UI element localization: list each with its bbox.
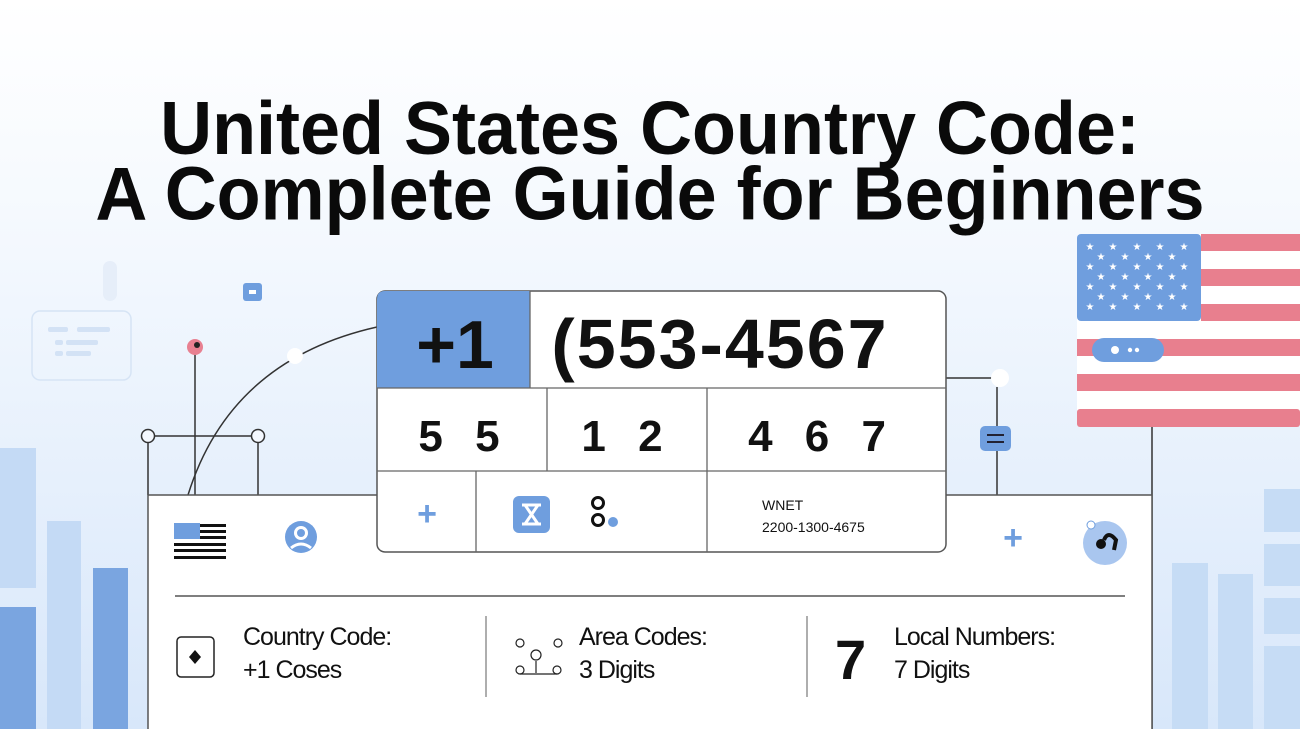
phone number card: + (417, 495, 437, 533)
flag: ★ (1180, 262, 1189, 273)
flag: ★ (1097, 252, 1106, 263)
flag: ★ (1133, 302, 1142, 313)
icon: small blue square (243, 283, 262, 301)
phone number card: 5 5 (418, 412, 510, 461)
stat: country code (177, 623, 391, 684)
flag: ★ (1109, 262, 1118, 273)
icon: equals badge (980, 426, 1011, 451)
flag: ★ (1133, 262, 1142, 273)
icon: blue badge (513, 496, 550, 533)
flag: ★ (1086, 262, 1095, 273)
phone number card: 2200-1300-4675 (762, 519, 865, 535)
stat: country code: Country Code: (243, 623, 391, 651)
stat: local numbers: Local Numbers: (894, 623, 1055, 651)
title: United States Country Code: (160, 87, 1140, 171)
flag: ★ (1156, 282, 1165, 293)
bottom panel: 3 Digits (579, 656, 655, 684)
flag: ★ (1168, 252, 1177, 263)
white node on arc (287, 348, 303, 364)
phone number card (377, 291, 946, 552)
flag: ★ (1156, 242, 1165, 253)
phone number card: 1 2 (581, 412, 673, 461)
stat: local numbers: 7 Digits (894, 656, 970, 684)
phone number card: (553-4567 (551, 305, 889, 383)
phone number card: WNET (762, 497, 804, 513)
background bars left (0, 448, 128, 729)
decorative faint card (32, 261, 131, 380)
flag: ★ (1086, 282, 1095, 293)
stat: local numbers (835, 623, 1055, 691)
flag: ★ (1086, 302, 1095, 313)
background bars right (1172, 489, 1300, 729)
flag: ★ (1086, 242, 1095, 253)
flag (1077, 234, 1300, 427)
flag: ★ (1109, 282, 1118, 293)
flag: ★ (1180, 302, 1189, 313)
flag: ★ (1109, 242, 1118, 253)
flag: ★ (1180, 282, 1189, 293)
connector lines left (142, 327, 377, 495)
phone number card: +1 (416, 307, 494, 383)
connector right (946, 378, 1152, 729)
flag: ★ (1156, 262, 1165, 273)
flag: ★ (1109, 302, 1118, 313)
flag: ★ (1133, 242, 1142, 253)
phone number card: 4 6 7 (748, 412, 896, 461)
flag: ★ (1097, 292, 1106, 303)
stat: country code: +1 Coses (243, 656, 342, 684)
title (95, 87, 1205, 236)
flag: ★ (1097, 272, 1106, 283)
icon: globe badge (1083, 521, 1127, 565)
flag: ★ (1168, 292, 1177, 303)
icon: mini flag (174, 523, 226, 559)
flag: ★ (1168, 272, 1177, 283)
stat: local numbers: 7 (835, 628, 866, 691)
flag: ★ (1133, 282, 1142, 293)
icon: pink marker (187, 339, 203, 355)
icon: dots (592, 498, 618, 527)
title: A Complete Guide for Beginners (95, 152, 1205, 236)
flag: ★ (1121, 292, 1130, 303)
flag: ★ (1121, 252, 1130, 263)
flag: ★ (1144, 252, 1153, 263)
flag: ★ (1144, 272, 1153, 283)
stat: area codes (516, 639, 562, 674)
bottom panel: Area Codes: (579, 623, 707, 651)
flag: ★ (1180, 242, 1189, 253)
flag: ★ (1156, 302, 1165, 313)
bottom panel (148, 495, 1152, 729)
flag: ★ (1121, 272, 1130, 283)
icon: user circle (285, 521, 317, 553)
icon: plus right: + (1003, 519, 1023, 557)
flag: ★ (1144, 292, 1153, 303)
